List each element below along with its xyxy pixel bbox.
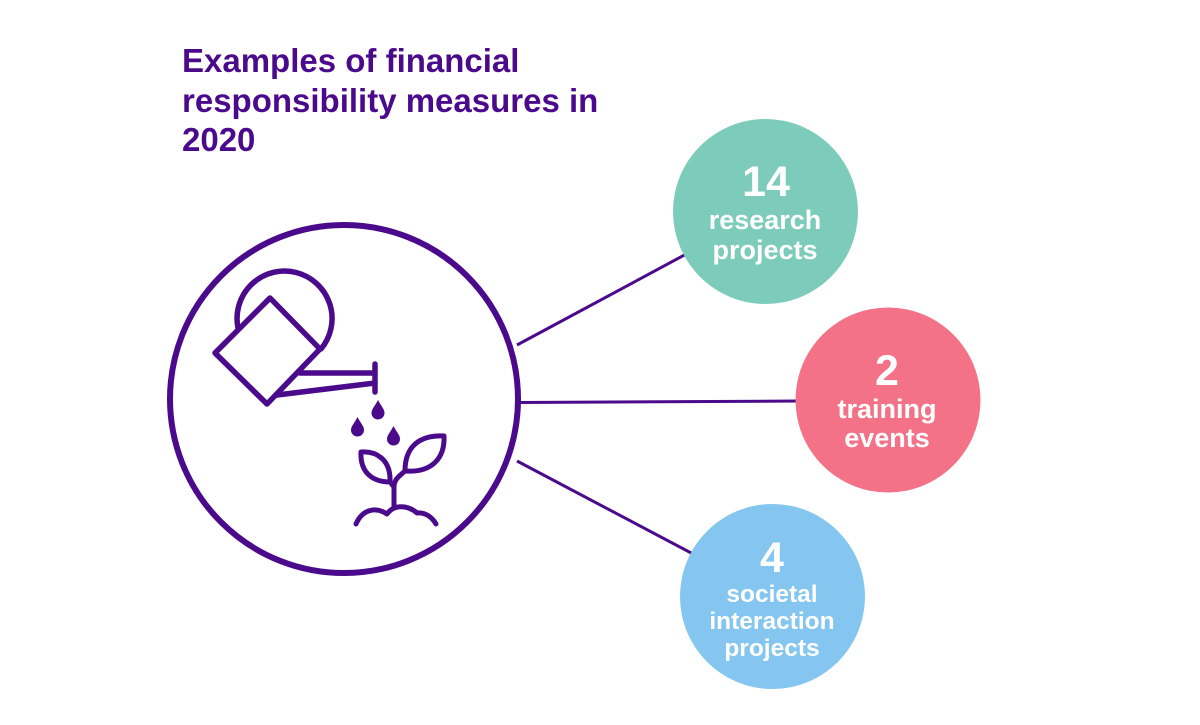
label: training events: training [838, 394, 936, 424]
icon: sprouting plant [356, 436, 444, 524]
label: societal interaction projects: projects [724, 635, 820, 662]
title [182, 42, 598, 158]
number: 2: 2 [875, 347, 899, 395]
number: 14: 14 [742, 158, 790, 206]
number: 4: 4 [760, 534, 784, 582]
panel: societal interaction projects [680, 504, 865, 689]
title: Examples of financial [182, 42, 519, 79]
connector: to research projects [517, 252, 690, 345]
panel: training events [796, 308, 980, 492]
label: societal interaction projects: societal [726, 581, 818, 608]
label: research projects: projects [712, 235, 818, 265]
title: responsibility measures in [182, 82, 598, 119]
icon: water drops [351, 400, 400, 446]
connector: to societal interaction projects [517, 461, 695, 555]
title: 2020 [182, 121, 255, 158]
panel: research projects [673, 119, 858, 304]
icon: watering can [215, 271, 375, 404]
large circle with watering can icon [170, 225, 518, 573]
label: training events: events [844, 423, 930, 453]
connector: to training events [520, 401, 800, 402]
label: research projects: research [709, 205, 821, 235]
label: societal interaction projects: interaction [709, 608, 835, 635]
